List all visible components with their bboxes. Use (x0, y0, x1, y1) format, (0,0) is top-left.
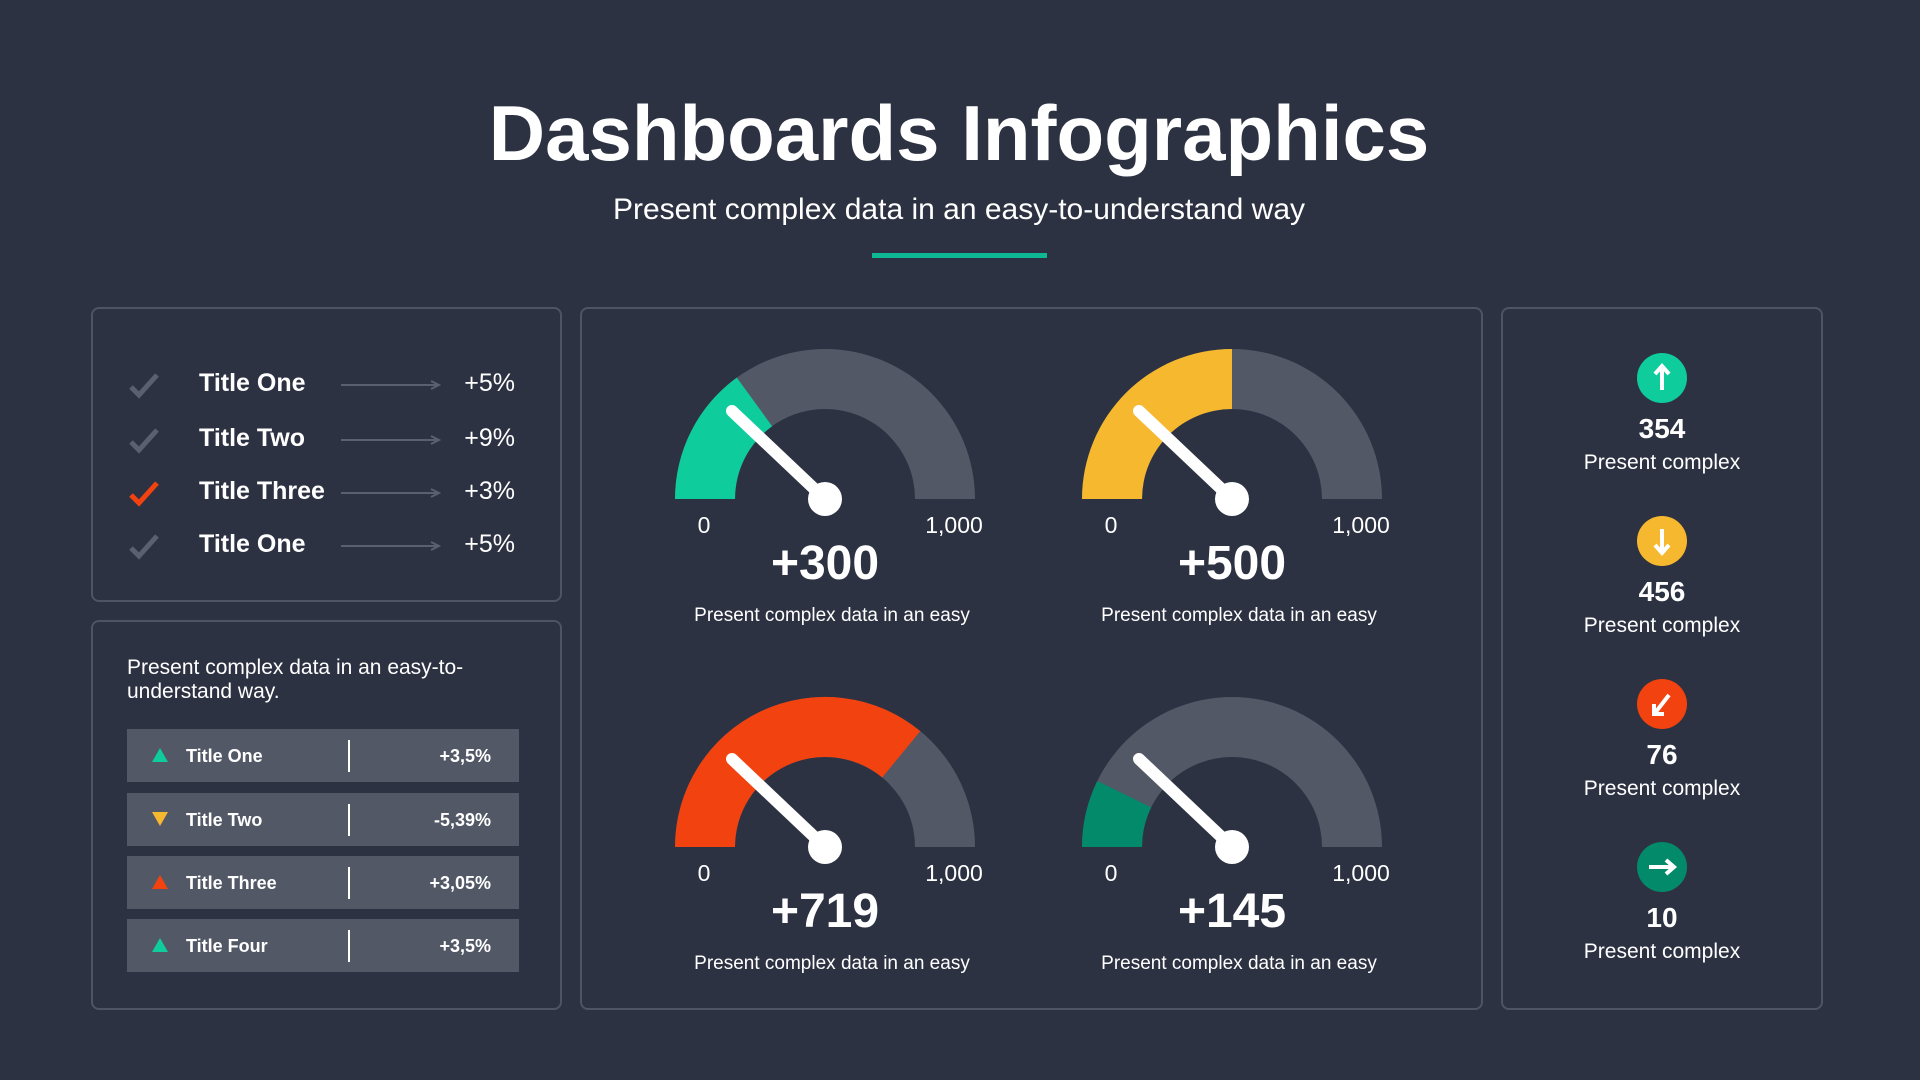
gauge 3 (675, 697, 983, 974)
stat 2: Present complex (1584, 614, 1740, 637)
panel: checklist (91, 307, 562, 602)
row 3 (129, 477, 515, 507)
row 1: +5% (464, 369, 515, 397)
gauge 1: Present complex data in an easy (694, 605, 970, 626)
table row 4: Title Four (186, 936, 268, 956)
stat 2 (1584, 516, 1740, 637)
row 4: Title One (199, 530, 306, 558)
gauge 2: 0 (1105, 512, 1117, 538)
stat 3: 76 (1646, 739, 1678, 770)
gauge 1: 0 (698, 512, 710, 538)
table row 2: -5,39% (434, 810, 491, 830)
gauge 4: Present complex data in an easy (1101, 953, 1377, 974)
stat 3: Present complex (1584, 777, 1740, 800)
row 4 (129, 530, 515, 560)
stat 4: 10 (1646, 902, 1678, 933)
title: Dashboards Infographics (489, 89, 1429, 177)
row 1: Title One (199, 369, 306, 397)
stat 4: Present complex (1584, 940, 1740, 963)
description text: Present complex data in an easy-to-understand way. (127, 656, 463, 703)
row 3: +3% (464, 477, 515, 505)
gauge 2: 1,000 (1332, 512, 1390, 538)
stat 4 (1584, 842, 1740, 963)
row 3: Title Three (199, 477, 325, 505)
row 2: +9% (464, 424, 515, 452)
gauge 2 (1082, 349, 1390, 626)
stat 3 (1584, 679, 1740, 800)
gauge 3: 1,000 (925, 860, 983, 886)
table row 1 (127, 729, 519, 782)
table row 3 (127, 856, 519, 909)
gauge 3: +719 (771, 885, 879, 938)
table row 1: +3,5% (439, 746, 491, 766)
row 2: Title Two (199, 424, 305, 452)
stat 1 (1584, 353, 1740, 474)
gauge 4: +145 (1178, 885, 1286, 938)
gauge 4: 0 (1105, 860, 1117, 886)
subtitle: Present complex data in an easy-to-understand way (613, 193, 1305, 226)
gauge 1: 1,000 (925, 512, 983, 538)
stat 1: Present complex (1584, 451, 1740, 474)
panel: gauges (580, 307, 1483, 1010)
gauge 2: Present complex data in an easy (1101, 605, 1377, 626)
gauge 4 (1082, 697, 1390, 974)
row 1 (129, 369, 515, 398)
accent underline (872, 253, 1047, 258)
stat 1: 354 (1639, 413, 1685, 444)
table row 2: Title Two (186, 810, 262, 830)
panel: stats (1501, 307, 1823, 1010)
gauge 1: +300 (771, 537, 879, 590)
table row 3: Title Three (186, 873, 277, 893)
panel: table (91, 620, 562, 1010)
table row 2 (127, 793, 519, 846)
gauge 3: 0 (698, 860, 710, 886)
gauge 2: +500 (1178, 537, 1286, 590)
table row 1: Title One (186, 746, 263, 766)
gauge 3: Present complex data in an easy (694, 953, 970, 974)
gauge 4: 1,000 (1332, 860, 1390, 886)
table row 3: +3,05% (429, 873, 491, 893)
row 2 (129, 424, 515, 454)
table row 4 (127, 919, 519, 972)
row 4: +5% (464, 530, 515, 558)
stat 2: 456 (1639, 576, 1685, 607)
gauge 1 (675, 349, 983, 626)
table row 4: +3,5% (439, 936, 491, 956)
